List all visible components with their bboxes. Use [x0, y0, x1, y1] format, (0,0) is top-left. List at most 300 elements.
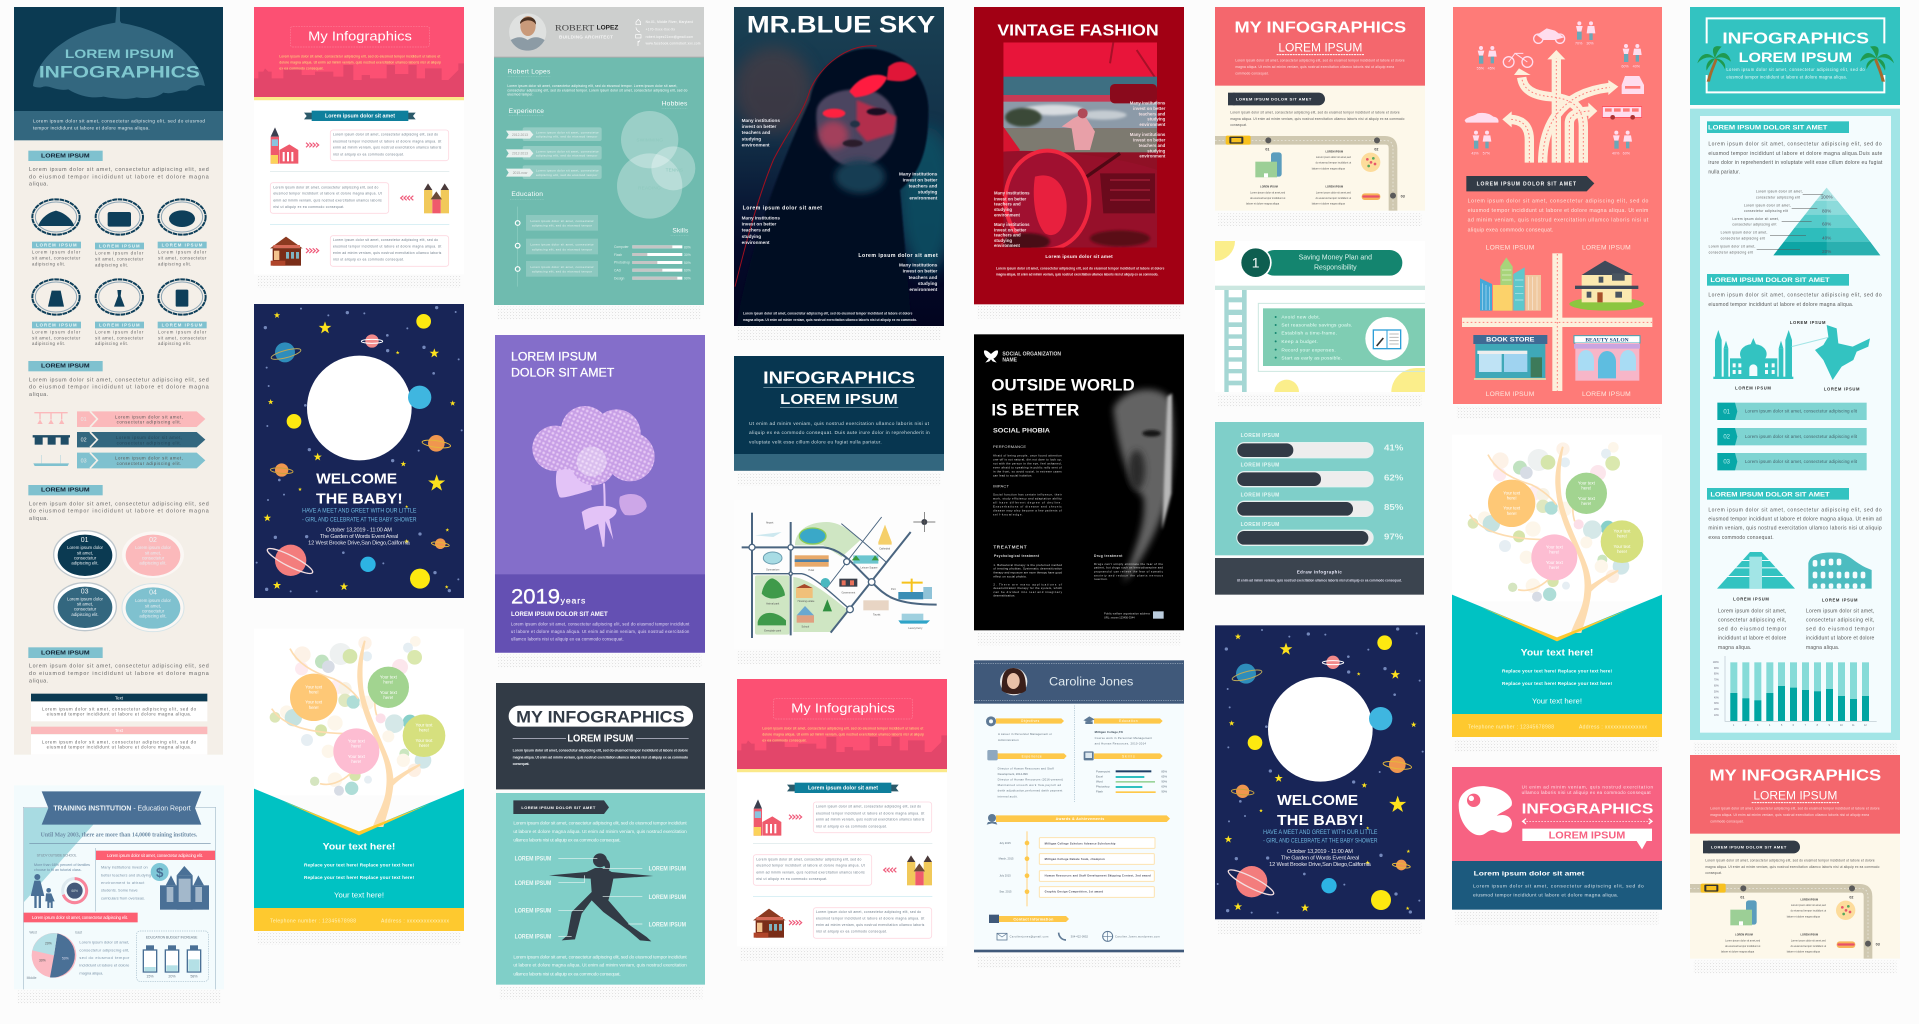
- circle labels copy: here!: [1617, 533, 1627, 538]
- section labels: Skills: [1122, 754, 1135, 758]
- experience: 2015-now: [513, 171, 528, 175]
- section: arrow list: Lorem ipsum dolor sit amet,: [115, 414, 183, 419]
- heading copy: [1277, 793, 1364, 829]
- building text: [101, 866, 151, 900]
- skills bars: 90%: [1161, 790, 1167, 794]
- section: India map: LOREM IPSUM DOLOR SIT AMET: [1710, 277, 1830, 284]
- road text copy: Lorem ipsum dolor sit amet,sed: [1791, 939, 1826, 942]
- footer: [1104, 611, 1164, 620]
- section: landmarks: Lorem ipsum dolor sit amet,: [1806, 608, 1874, 614]
- building text: Many institutions invest on: [101, 866, 148, 870]
- section: lamps: Lorem ipsum dolor: [95, 251, 144, 256]
- family and donut: 68%: [71, 889, 78, 893]
- rows of text: eiusmod tempor incididunt ut labore et dolore magna aliqua. Ut: [273, 192, 382, 196]
- bar values: [1384, 443, 1404, 542]
- road text copy: LOREM IPSUM: [1735, 933, 1753, 936]
- skills bars: Photoshop: [1096, 784, 1110, 788]
- experience: Experience: [509, 108, 544, 115]
- section: numbered ovals: aliqua.: [29, 516, 48, 522]
- circle labels copy: here!: [1581, 501, 1591, 506]
- section: lamps: sit amet, consectetur: [95, 257, 144, 262]
- intro copy: [1710, 807, 1880, 823]
- headline copy: Your text here!: [1521, 648, 1593, 658]
- body text: Lorem ipsum dolor sit amet, consectetur adipiscing elit, sed do eiusmod tempor incididunt: [511, 622, 690, 627]
- section: numbered list: [1717, 403, 1867, 470]
- section labels: Contact Information: [1013, 917, 1053, 921]
- circle labels: here!: [419, 743, 429, 748]
- section: numbered ovals: 01: [81, 537, 89, 544]
- road text: LOREM IPSUM: [1326, 150, 1343, 153]
- resume text: Milligan College,TN: [1095, 730, 1123, 734]
- rows of text copy: Lorem ipsum dolor sit amet, consectetur adipiscing elit, sed do: [816, 910, 921, 914]
- paragraph copy: magna aliqua. Ut enim ad minim veniam, quis nostrud exercitation ullamco laboris nisi ut aliquip ex ea commodo: [1705, 865, 1880, 869]
- building text: environment to attract: [101, 881, 145, 885]
- section: arrow list: Lorem ipsum dolor sit amet,: [116, 435, 182, 440]
- profile: eiusmod tempor.: [507, 93, 533, 97]
- hobbies venn: [617, 100, 695, 219]
- stacked bar chart: 50%: [1714, 691, 1719, 693]
- heading: [316, 472, 403, 508]
- performance: Afraid of being people, once found attention: [993, 453, 1062, 457]
- body text: voluptate velit esse cillum dolore eu fugiat nulla pariatur.: [749, 440, 882, 446]
- circle labels copy: Your text: [1503, 506, 1521, 511]
- section: numbered ovals: consectetur: [142, 555, 165, 560]
- section: arrow list: consectetur adipiscing elit.: [117, 461, 181, 466]
- checklist panel: Set reasonable savings goals.: [1281, 323, 1352, 329]
- footer: Telephone number : 12345678988: [270, 918, 356, 924]
- tag: LOREM IPSUM DOLOR SIT AMET: [521, 805, 596, 810]
- checklist panel: Keep a budget.: [1281, 339, 1318, 345]
- invitation text: [302, 509, 417, 547]
- body text: [1473, 883, 1644, 899]
- icon: dollar and building: [151, 863, 209, 910]
- intro copy: ex ea commodo consequat.: [762, 739, 807, 743]
- circle labels: here!: [383, 680, 393, 685]
- section: India map: LOREM IPSUM: [1824, 386, 1860, 391]
- invitation text: 12 West Brooke Drive,San Diego,California: [308, 541, 411, 547]
- road labels copy: 01: [1740, 895, 1744, 899]
- section: text table: aliqua.: [29, 679, 48, 685]
- rows of text: Lorem ipsum dolor sit amet, consectetur adipiscing elit, sed do: [333, 133, 438, 137]
- map parks: [755, 522, 860, 635]
- section: text table: [28, 647, 209, 755]
- map labels: [764, 521, 923, 632]
- battery chart: 20%: [168, 974, 176, 978]
- text blocks: Many institutions: [1130, 132, 1166, 137]
- title copy: [1710, 768, 1882, 803]
- map labels: Airport: [766, 521, 774, 524]
- subtitle: SOCIAL PHOBIA: [993, 428, 1050, 435]
- treatment: Psychological treatment: [994, 554, 1040, 558]
- panel: My Infographics pink copy: [737, 679, 947, 946]
- bottom text: ullamco laboris nisi ut aliquip ex ea commodo consequat.: [513, 971, 621, 976]
- title: My Infographics: [308, 29, 412, 44]
- skills chart: Skills: [672, 227, 689, 234]
- rows of text copy: enim ad minim veniam, quis nostrud exercitation ullamco laboris: [816, 923, 925, 927]
- panel: teal long infographic: [1690, 109, 1900, 740]
- text blocks: studying: [742, 137, 761, 142]
- section: pyramid: 100%: [1821, 195, 1833, 200]
- stacked bar chart: 12: [1864, 725, 1867, 727]
- family and donut: [31, 853, 90, 908]
- intro: [1726, 67, 1865, 80]
- treatment: 1. Behavioral therapy is the preferred method: [993, 563, 1062, 567]
- panel: lamp infographics: [14, 7, 223, 755]
- performance: not with the person in the eye, feel ashamed,: [993, 461, 1062, 465]
- education: adipiscing elit, sed do eiusmod tempor: [532, 270, 592, 274]
- panel: My Infographics pink: [254, 7, 464, 274]
- profile: consectetur adipiscing elit, sed do eiusmod tempor. Lorem ipsum dolor sit amet, consectetur adipiscing elit, sed do: [507, 88, 688, 92]
- body text: Replace your text here! Replace your text here!: [304, 875, 414, 880]
- title: MY INFOGRAPHICS: [1234, 20, 1407, 37]
- section: text table: do eiusmod tempor incididunt ut labore et dolore magna: [29, 671, 209, 677]
- section: pyramid: irure dolor in reprehenderit in voluptate velit esse cillum dolore eu fugiat: [1708, 160, 1883, 166]
- tag: LOREM IPSUM DOLOR SIT AMET: [1477, 181, 1576, 187]
- hobbies venn: SWIMMING: [636, 137, 663, 142]
- section: arrow list: do eiusmod tempor incididunt ut labore et dolore magna: [29, 385, 209, 391]
- paragraph: [1468, 198, 1649, 233]
- stacked bar chart: 20%: [1714, 709, 1719, 711]
- section: lamps: Lorem ipsum dolor: [32, 330, 81, 335]
- yoga labels: LOREM IPSUM: [649, 866, 686, 873]
- skills bars: 60%: [1161, 784, 1167, 788]
- circle labels copy: here!: [1581, 486, 1591, 491]
- section: landmarks: incididunt ut labore et dolore: [1806, 636, 1875, 642]
- pie chart: West: [29, 931, 37, 935]
- section: numbered ovals: 02: [149, 537, 157, 544]
- title copy: MY INFOGRAPHICS: [1710, 768, 1882, 785]
- section: numbered ovals: Lorem ipsum dolor: [135, 545, 171, 550]
- section: numbered ovals: sit amet,: [145, 550, 161, 555]
- icon: dollar and building: $: [156, 865, 164, 880]
- yoga labels: LOREM IPSUM: [515, 934, 551, 941]
- skills chart: 30%: [684, 253, 691, 257]
- body text: Ut enim ad minim veniam, quis nostrud exercitation ullamco laboris nisi ut: [749, 421, 930, 427]
- title: lamp infographics: LOREM IPSUM: [65, 47, 174, 61]
- road text copy: labore et dolore magna aliqua: [1787, 950, 1820, 953]
- headline: Your text here!: [323, 842, 395, 852]
- section: numbered ovals: adipiscing elit.: [139, 614, 167, 619]
- panel: Mr. Blue Sky: [733, 7, 957, 326]
- panel: tree poster copy: Your text here!: [1532, 696, 1582, 705]
- checklist panel: Avoid new debt.: [1281, 315, 1320, 321]
- invitation text: - GIRL AND CELEBRATE AT THE BABY SHOWER: [302, 517, 417, 523]
- skills chart: Design: [614, 276, 625, 280]
- footer band: Edraw Infographic: [1297, 570, 1342, 575]
- text blocks: teachers and: [742, 130, 771, 135]
- icon: yoga silhouette: [549, 853, 653, 941]
- stacked bar chart: 80%: [1714, 674, 1719, 676]
- awards timeline: Milligan College Scholars Advance Scholarship: [1045, 841, 1116, 845]
- paragraph: [1230, 111, 1405, 127]
- performance: PERFORMANCE: [993, 444, 1026, 449]
- text blocks: studying: [742, 234, 761, 239]
- road text copy: do eiusmod tempor incididunt ut: [1791, 945, 1826, 948]
- title: OUTSIDE WORLD: [991, 376, 1135, 395]
- body text: [304, 862, 414, 880]
- year: 2019: [511, 585, 560, 609]
- text blocks: studying: [918, 190, 937, 195]
- hobbies venn: READING: [638, 185, 661, 190]
- battery chart: 58%: [190, 974, 198, 978]
- section: lamps: adipiscing elit.: [158, 261, 191, 266]
- treatment: effect on social phobia.: [993, 575, 1027, 579]
- section: lamps: adipiscing elit.: [95, 341, 128, 346]
- battery chart: [137, 931, 208, 981]
- section: lamps: sit amet, consectetur: [32, 256, 81, 261]
- footer copy: [1468, 724, 1648, 730]
- photo: portrait: [733, 46, 957, 326]
- heading: INFOGRAPHICS: [763, 367, 915, 387]
- road text copy: LOREM IPSUM: [1801, 898, 1818, 901]
- bottom text: ut labore et dolore magna aliqua. Ut enim ad minim veniam, quis nostrud exercitation: [513, 963, 687, 968]
- section: numbered ovals: Lorem ipsum dolor: [135, 598, 171, 603]
- footer band: [1215, 558, 1424, 595]
- stacked bar chart: 4: [1769, 725, 1771, 727]
- section: lamps: LOREM IPSUM: [99, 323, 140, 328]
- section: lamps: sit amet, consectetur: [32, 335, 81, 340]
- panel: palette infographics: [1452, 767, 1662, 910]
- invitation text copy: - GIRL AND CELEBRATE AT THE BABY SHOWER: [1263, 839, 1378, 845]
- skills bars: Excel: [1096, 774, 1103, 778]
- rows of text: nisi ut aliquip ex ea commodo consequat.: [333, 152, 404, 156]
- panel: Mr. Blue Sky: Lorem ipsum dolor sit amet: [743, 206, 822, 212]
- skills chart: 60%: [684, 269, 691, 273]
- hobbies venn: Hobbies: [662, 100, 688, 107]
- section: numbered ovals: do eiusmod tempor incididunt ut labore et dolore magna: [29, 509, 209, 515]
- name: [555, 22, 618, 40]
- treatment: Drug treatment: [1094, 554, 1123, 558]
- section: lamps: Lorem ipsum dolor: [158, 330, 207, 335]
- section: lamps: LOREM IPSUM: [36, 243, 77, 248]
- text blocks: Many institutions: [994, 222, 1030, 227]
- yoga labels: LOREM IPSUM: [515, 880, 551, 887]
- awards timeline: March, 2015: [999, 857, 1014, 861]
- performance: even afraid to speaking in public rally sent of: [993, 465, 1062, 469]
- pie text: consectetur adipiscing elit,: [79, 947, 129, 952]
- section: numbered ovals: 03: [81, 588, 89, 595]
- bottom text: Lorem ipsum dolor sit amet, consectetur adipiscing elit, sed do eiusmod tempor incididunt: [513, 954, 687, 959]
- stacked bar chart: 6: [1793, 725, 1795, 727]
- banner: [42, 791, 201, 825]
- heading pill: 1: [1252, 255, 1260, 271]
- intro copy: Lorem ipsum dolor sit amet, consectetur adipiscing elit, sed do eiusmod tempor incididunt ut labore et: [762, 727, 923, 731]
- resume text: and Human Resources, 2010-2014: [1095, 742, 1146, 746]
- circle labels copy: here!: [1549, 550, 1559, 555]
- section: lamps: sit amet, consectetur: [158, 256, 207, 261]
- text blocks: teachers and: [1139, 143, 1166, 148]
- yoga labels: LOREM IPSUM: [649, 894, 686, 901]
- bar labels: LOREM IPSUM: [1241, 522, 1279, 528]
- organization: NAME: [1002, 357, 1018, 363]
- skills bars: Powerpoint: [1096, 769, 1110, 773]
- experience: adipiscing elit, sed do eiusmod tempor: [536, 135, 597, 139]
- performance: Exacerbations of disease and chronic: [993, 504, 1062, 508]
- skills chart: [614, 227, 691, 281]
- resume text: [998, 730, 1152, 798]
- section labels: Education: [1119, 719, 1138, 723]
- section: lamps: adipiscing elit.: [95, 262, 128, 267]
- invitation text copy: [1263, 830, 1378, 868]
- quadrant labels: LOREM IPSUM: [1486, 391, 1534, 398]
- heading pill: Saving Money Plan and: [1299, 255, 1372, 262]
- circle labels: Your text: [305, 700, 323, 705]
- caption: Lorem ipsum dolor sit amet: [1045, 254, 1113, 259]
- skills chart: CAD: [614, 269, 622, 273]
- text blocks: environment: [909, 196, 938, 201]
- road text: [1246, 150, 1351, 205]
- circle labels copy: here!: [1507, 511, 1517, 516]
- section: text table: Lorem ipsum dolor sit amet, consectetur adipiscing elit, sed: [29, 664, 209, 670]
- text blocks: teachers and: [909, 184, 937, 189]
- icons: people stats: 45%: [1488, 66, 1496, 70]
- section: lamps: adipiscing elit.: [32, 341, 65, 346]
- arrow line: [1523, 819, 1652, 824]
- panel: My Infographics coral copy: [1690, 755, 1900, 959]
- photo: car interior: [1003, 42, 1157, 250]
- stacked bar chart: 70%: [1714, 680, 1719, 682]
- text blocks: environment: [742, 240, 770, 245]
- top text: Lorem ipsum dolor sit amet, consectetur adipiscing elit, sed do eiusmod tempor incididunt: [513, 821, 687, 826]
- panel: welcome the baby copy: [1215, 625, 1425, 919]
- text blocks: teachers and: [994, 233, 1021, 238]
- experience: Lorem ipsum dolor sit amet, consectetur: [536, 149, 599, 153]
- section: numbered ovals: Lorem ipsum dolor: [67, 545, 103, 550]
- contact: www.facebook.com/robert.xxx.com: [646, 42, 701, 46]
- section: pyramid: Lorem ipsum dolor sit amet,: [1756, 190, 1803, 194]
- stacked bar chart: 2: [1745, 725, 1747, 727]
- panel: tree poster: [254, 629, 464, 931]
- title: LOREM IPSUM: [1278, 41, 1362, 55]
- body text: aliquip ex ea commodo consequat. Duis aute irure dolor in reprehenderit in: [749, 430, 930, 436]
- circle labels: here!: [351, 744, 361, 749]
- paragraph: ad minim veniam, quis nostrud exercitation ullamco laboris nisi ut: [1468, 218, 1649, 224]
- year: [511, 585, 586, 609]
- text blocks: invest on better: [903, 269, 938, 274]
- contact info: 304-422-0952: [1071, 935, 1089, 939]
- body text copy: Replace your text here! Replace your text here!: [1502, 668, 1612, 673]
- section: numbered ovals: adipiscing elit.: [71, 612, 99, 617]
- intro: ullamco laboris nisi ut aliquip ex ea commodo consequat: [1522, 790, 1651, 795]
- section: lamps: do eiusmod tempor incididunt ut labore et dolore magna: [29, 174, 209, 180]
- quadrant labels: LOREM IPSUM: [1582, 391, 1631, 398]
- road text copy: do eiusmod tempor incididunt ut: [1791, 910, 1826, 913]
- photo: blurred face: [1113, 389, 1173, 583]
- education: Lorem ipsum dolor sit amet, consectetur: [530, 243, 594, 247]
- section: lamps: sit amet, consectetur: [158, 335, 207, 340]
- awards timeline: Graphic Design Competition, 1st award: [1045, 890, 1103, 894]
- pie chart: East: [75, 931, 82, 935]
- treatment: Drugs can't simply eliminate the fear of the: [1094, 562, 1163, 566]
- icon: book store: [1473, 335, 1547, 380]
- experience: adipiscing elit, sed do eiusmod tempor: [536, 154, 597, 158]
- checklist panel: Establish a time-frame.: [1281, 331, 1337, 337]
- checklist panel: [1258, 303, 1425, 371]
- icons: people stats: 60%: [1621, 64, 1629, 68]
- section: lamps: LOREM IPSUM: [41, 153, 90, 159]
- paragraph: aliquip exea commodo consequat.: [1468, 227, 1553, 233]
- title: MR.BLUE SKY: [747, 12, 935, 39]
- performance: one-off is not natural, dirt not dare to look up,: [993, 457, 1062, 461]
- section: arrow list: consectetur adipiscing elit.: [117, 420, 181, 425]
- skills chart: Photoshop: [614, 261, 630, 265]
- experience: 2012-2013: [512, 152, 528, 156]
- bar fills: [1237, 443, 1368, 545]
- body text: magna aliqua. Ut enim ad minim veniam, quis nostrud exercitation ullamco laboris nisi ut aliquip ex ea commodo.: [996, 272, 1158, 276]
- treatment: desensitization therapy for the system, which: [993, 586, 1062, 590]
- pie text: incididunt ut labore et dolore: [79, 963, 130, 968]
- footer band: Ut enim ad minim veniam, quis nostrud exercitation ullamco laboris nisi ut aliquip ex ea commodo consequat.: [1237, 579, 1402, 583]
- section: text table: eiusmod tempor incididunt ut labore et dolore magna aliqua.: [47, 744, 191, 749]
- awards timeline: Human Resources and Staff Development Skipping Contest, 2nd award: [1045, 874, 1151, 878]
- map landmarks: [755, 512, 935, 625]
- intro: Lorem ipsum dolor sit amet, consectetur adipiscing elit, sed do eiusmod tempor incididunt ut labore et: [279, 55, 440, 59]
- section labels: [1013, 719, 1138, 921]
- section: lamps: aliqua.: [29, 182, 48, 188]
- section: pyramid: consectetur adipiscing elit: [1732, 223, 1776, 227]
- title copy: LOREM IPSUM: [1753, 789, 1837, 803]
- icons: people stats: 57%: [1483, 151, 1491, 155]
- building text: students. Some have: [101, 889, 138, 893]
- section: text table: Text: [115, 728, 124, 733]
- panel: progress bars: [1215, 422, 1424, 595]
- text blocks: invest on better: [903, 177, 938, 182]
- panel: saving money plan: [1215, 241, 1425, 392]
- skills bars: [1096, 769, 1167, 794]
- intro: [1235, 59, 1405, 75]
- text blocks: environment: [909, 287, 938, 292]
- awards timeline: July 2015: [999, 873, 1011, 877]
- icons: people stats: 43%: [1471, 151, 1479, 155]
- section: numbered list: Lorem ipsum dolor sit amet, consectetur adipiscing elit: [1745, 459, 1858, 464]
- road labels: 03: [1401, 195, 1405, 199]
- section labels: Awards & Achievements: [1056, 817, 1104, 821]
- title: [991, 376, 1135, 419]
- treatment: desensitization.: [993, 594, 1016, 598]
- bar values: 62%: [1384, 472, 1404, 482]
- circle labels: Your text: [416, 738, 433, 743]
- icons: people stats: 40%: [1633, 64, 1641, 68]
- icon: lamp shade header: [33, 7, 205, 99]
- panel: Caroline Jones resume: [974, 660, 1184, 952]
- awards timeline: July 2015: [999, 841, 1011, 845]
- section: landmarks: eiusmod tempor incididunt ut labore et dolore magna aliqua. Ut enim ad: [1708, 516, 1882, 522]
- text blocks: invest on better: [994, 227, 1027, 232]
- year: years: [561, 596, 586, 606]
- section: pyramid: consectetur adipiscing elit: [1709, 250, 1753, 254]
- experience: [506, 108, 602, 179]
- text blocks: studying: [1147, 148, 1166, 153]
- pie chart: [27, 931, 82, 980]
- contact: [636, 19, 701, 46]
- section: numbered list: 02: [1723, 435, 1731, 441]
- crossroads: [1462, 253, 1652, 391]
- text blocks: invest on better: [1133, 138, 1166, 143]
- road labels copy: 03: [1876, 943, 1880, 947]
- stacked bar chart: [1713, 656, 1877, 727]
- road text: labore et dolore magna aliqua: [1246, 202, 1280, 205]
- stacked bar chart: 30%: [1714, 703, 1719, 705]
- paragraph: Lorem ipsum dolor sit amet, consectetur adipiscing elit, sed do: [1468, 198, 1648, 204]
- section: India map: [1707, 274, 1882, 391]
- map labels: School: [802, 626, 810, 629]
- intro copy: [762, 727, 924, 743]
- icons: people stats: 55%: [1477, 66, 1485, 70]
- rows of text copy: nisi ut aliquip ex ea commodo consequat.: [816, 824, 887, 828]
- building text: curriculars from overseas.: [101, 896, 145, 900]
- header: [974, 660, 1184, 704]
- stacked bar chart: 60%: [1714, 686, 1719, 688]
